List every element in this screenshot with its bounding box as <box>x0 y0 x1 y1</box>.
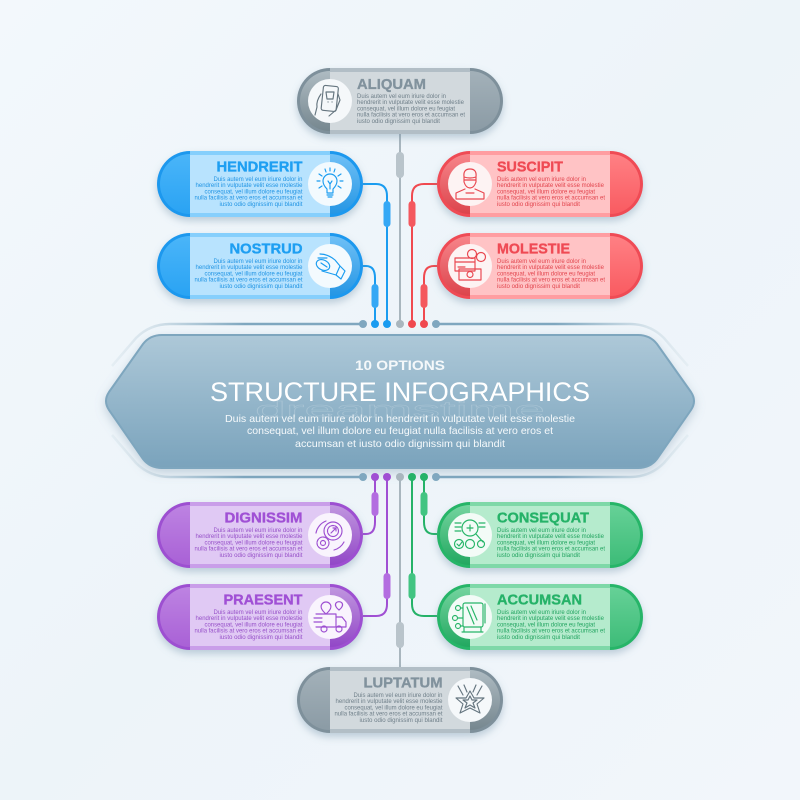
body text: nulla facilisis at vero eros et accumsan et <box>194 278 303 284</box>
body text: iusto odio dignissim qui blandit <box>220 553 303 559</box>
connector: Luptatum grey <box>396 473 404 667</box>
central description: accumsan et iusto odio dignissim qui blandit <box>295 438 505 450</box>
body text: Duis autem vel eum iriure dolor in <box>214 259 302 265</box>
body text: consequat, vel illum dolore eu feugiat <box>497 189 595 195</box>
body text: iusto odio dignissim qui blandit <box>357 119 440 125</box>
central description: Duis autem vel eum iriure dolor in hendrerit in vulputate velit esse molestie <box>225 413 575 425</box>
body text: Duis autem vel eum iriure dolor in <box>214 610 302 616</box>
heading: PRAESENT <box>224 592 302 608</box>
heading: CONSEQUAT <box>497 510 589 526</box>
panel: Praesent <box>157 584 363 650</box>
body text <box>497 610 605 641</box>
body text <box>194 528 303 559</box>
body text: Duis autem vel eum iriure dolor in <box>214 528 302 534</box>
connector: Nostrud blue <box>363 266 379 328</box>
body text: consequat, vel illum dolore eu feugiat <box>497 540 595 546</box>
connector: Suscipit red <box>408 184 437 328</box>
body text: nulla facilisis at vero eros et accumsan et <box>497 196 605 202</box>
central hexagon panel <box>106 335 694 468</box>
body text: iusto odio dignissim qui blandit <box>220 635 303 641</box>
body text: iusto odio dignissim qui blandit <box>497 635 580 641</box>
heading: NOSTRUD <box>230 240 303 258</box>
body text <box>194 177 303 208</box>
connector: Aliquam grey <box>396 134 404 328</box>
body text: consequat, vel illum dolore eu feugiat <box>204 540 303 546</box>
icon: delivery truck with pins <box>314 602 346 632</box>
panel: Dignissim <box>157 502 363 568</box>
icon: hand with coin <box>315 254 345 279</box>
body text <box>497 177 605 208</box>
heading: DIGNISSIM <box>224 510 302 526</box>
main title: STRUCTURE INFOGRAPHICS <box>210 377 590 407</box>
body text: Duis autem vel eum iriure dolor in <box>497 259 586 265</box>
body text: hendrerit in vulputate velit esse molestie <box>336 699 443 705</box>
body text: nulla facilisis at vero eros et accumsan et <box>194 629 303 635</box>
body text: consequat, vel illum dolore eu feugiat <box>497 622 595 628</box>
body text: hendrerit in vulputate velit esse molestie <box>196 183 303 189</box>
body text: hendrerit in vulputate velit esse molestie <box>497 616 605 622</box>
subtitle: 10 options: 10 OPTIONS <box>355 357 445 373</box>
body text: iusto odio dignissim qui blandit <box>497 553 580 559</box>
heading: ALIQUAM <box>357 76 426 93</box>
body text: nulla facilisis at vero eros et accumsan et <box>334 712 443 718</box>
central description: consequat, vel illum dolore eu feugiat nulla facilisis at vero eros et <box>247 425 553 437</box>
body text <box>497 528 605 559</box>
icon: device with network nodes <box>452 603 485 632</box>
body text <box>194 259 303 290</box>
icon: light bulb <box>317 168 343 197</box>
body text: hendrerit in vulputate velit esse molestie <box>196 616 303 622</box>
icon: hand holding phone <box>315 85 340 116</box>
connector: Accumsan green <box>408 473 437 616</box>
icon: gears <box>316 521 344 550</box>
central description <box>225 413 575 450</box>
body text: consequat, vel illum dolore eu feugiat <box>204 189 303 195</box>
icon: star award <box>456 685 484 713</box>
panel: Hendrerit <box>157 151 363 217</box>
watermark: dreamstime <box>255 397 545 422</box>
body text: nulla facilisis at vero eros et accumsan et <box>194 547 303 553</box>
panel: Molestie <box>437 233 643 299</box>
heading: ACCUMSAN <box>497 592 582 608</box>
body text: nulla facilisis at vero eros et accumsan et <box>497 278 605 284</box>
icon: person <box>456 169 484 199</box>
heading: MOLESTIE <box>497 240 570 258</box>
body text <box>497 259 605 290</box>
body text: Duis autem vel eum iriure dolor in <box>497 610 586 616</box>
body text: consequat, vel illum dolore eu feugiat <box>497 271 595 277</box>
panel: Suscipit <box>437 151 643 217</box>
body text: hendrerit in vulputate velit esse molestie <box>497 534 605 540</box>
body text: iusto odio dignissim qui blandit <box>220 284 303 290</box>
body text: consequat, vel illum dolore eu feugiat <box>204 271 303 277</box>
body text <box>357 94 465 125</box>
body text: iusto odio dignissim qui blandit <box>497 202 580 208</box>
body text: iusto odio dignissim qui blandit <box>497 284 580 290</box>
body text: iusto odio dignissim qui blandit <box>360 718 443 724</box>
connector: Molestie red <box>420 266 437 328</box>
panel: Nostrud <box>157 233 363 299</box>
icon: card, cash and coins <box>455 250 486 280</box>
connector: Praesent purple <box>363 473 391 616</box>
body text: Duis autem vel eum iriure dolor in <box>497 528 586 534</box>
body text: Duis autem vel eum iriure dolor in <box>354 693 442 699</box>
panel: Aliquam <box>297 68 503 134</box>
connector: Dignissim purple <box>363 473 379 534</box>
body text: hendrerit in vulputate velit esse molestie <box>497 265 605 271</box>
end dots: outline terminals <box>359 320 440 481</box>
body text: consequat, vel illum dolore eu feugiat <box>344 705 443 711</box>
body text: hendrerit in vulputate velit esse molestie <box>196 265 303 271</box>
outer outline around central hexagon <box>112 324 688 477</box>
panel: Consequat <box>437 502 643 568</box>
body text: nulla facilisis at vero eros et accumsan et <box>357 113 465 119</box>
body text <box>194 610 303 641</box>
body text: iusto odio dignissim qui blandit <box>220 202 303 208</box>
body text: Duis autem vel eum iriure dolor in <box>357 94 446 100</box>
body text: hendrerit in vulputate velit esse molestie <box>357 100 465 106</box>
icon: magnifier and checks <box>454 520 485 548</box>
connector: Consequat green <box>420 473 437 534</box>
heading: HENDRERIT <box>216 158 302 176</box>
panel: Luptatum <box>297 667 503 733</box>
body text: Duis autem vel eum iriure dolor in <box>497 177 586 183</box>
panel: Accumsan <box>437 584 643 650</box>
body text: consequat, vel illum dolore eu feugiat <box>204 622 303 628</box>
body text: hendrerit in vulputate velit esse molestie <box>196 534 303 540</box>
body text: nulla facilisis at vero eros et accumsan et <box>497 547 605 553</box>
connector: Hendrerit blue <box>363 184 391 328</box>
heading: LUPTATUM <box>364 674 442 692</box>
body text: consequat, vel illum dolore eu feugiat <box>357 106 455 112</box>
body text <box>334 693 443 724</box>
body text: Duis autem vel eum iriure dolor in <box>214 177 302 183</box>
body text: hendrerit in vulputate velit esse molestie <box>497 183 605 189</box>
body text: nulla facilisis at vero eros et accumsan et <box>497 629 605 635</box>
heading: SUSCIPIT <box>497 158 563 176</box>
body text: nulla facilisis at vero eros et accumsan et <box>194 196 303 202</box>
